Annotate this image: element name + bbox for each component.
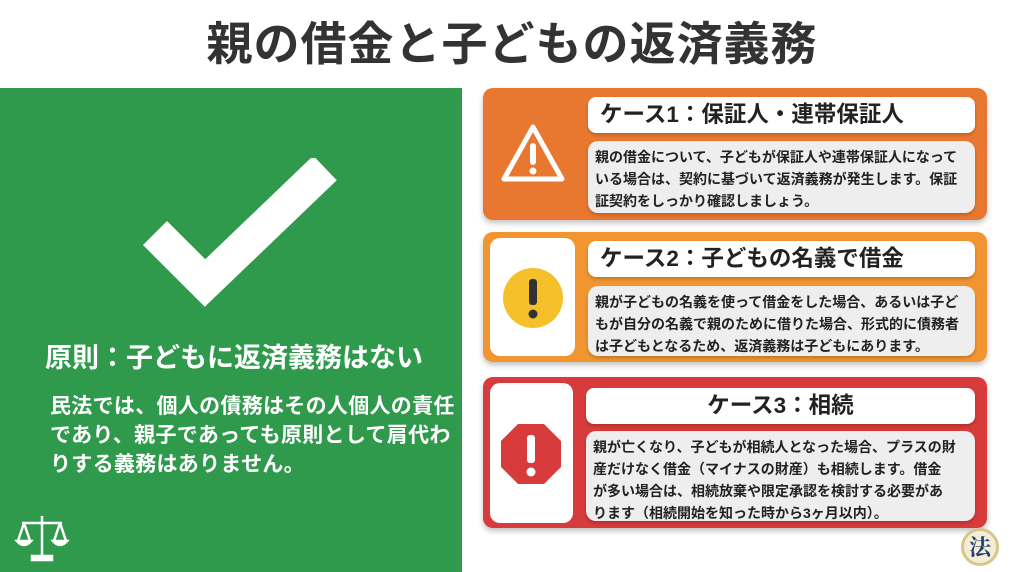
- text: case 1 body: 証契約をしっかり確認しましょう。: [595, 193, 818, 209]
- icon: yellow exclamation: [490, 238, 575, 356]
- heading: case 1: [588, 97, 975, 133]
- text: case 1 body: [588, 141, 975, 213]
- text: case 3 body: 親が亡くなり、子どもが相続人となった場合、プラスの財: [593, 439, 956, 455]
- icon: law badge: 法: [969, 531, 991, 562]
- heading: principle: 原則：子どもに返済義務はない: [45, 343, 423, 373]
- text: case 2 body: もが自分の名義で親のために借りた場合、形式的に債務者: [595, 316, 959, 332]
- heading: case 1: ケース1：保証人・連帯保証人: [600, 102, 904, 127]
- title: 親の借金と子どもの返済義務: [206, 18, 818, 70]
- icon: scales: [14, 516, 70, 562]
- text: case 2 body: 親が子どもの名義を使って借金をした場合、あるいは子ど: [595, 294, 958, 310]
- text: case 1 body: 親の借金について、子どもが保証人や連帯保証人になって: [595, 149, 957, 165]
- text: case 2 body: は子どもとなるため、返済義務は子どもにあります。: [595, 338, 929, 354]
- heading: case 3: ケース3：相続: [707, 393, 854, 418]
- text: case 3 body: 産だけなく借金（マイナスの財産）も相続します。借金: [593, 461, 941, 477]
- heading: case 2: [588, 241, 975, 277]
- icon: stop sign: [490, 383, 573, 523]
- panel: case 2: [483, 232, 987, 362]
- text: case 3 body: ります（相続開始を知った時から3ヶ月以内）。: [593, 505, 888, 521]
- icon: law badge: [961, 528, 999, 566]
- text: case 3 body: [586, 431, 975, 521]
- text: case 3 body: が多い場合は、相続放棄や限定承認を検討する必要があ: [593, 483, 943, 499]
- panel: case 1: [483, 88, 987, 220]
- text: principle body: 民法では、個人の債務はその人個人の責任であり、親子であっても原則として肩代わりする義務はありません。: [50, 395, 455, 476]
- panel: case 3: [483, 377, 987, 528]
- icon: checkmark: [143, 158, 337, 307]
- text: case 1 body: いる場合は、契約に基づいて返済義務が発生します。保証: [595, 171, 957, 187]
- panel: principle: [0, 88, 462, 572]
- icon: warning triangle: [502, 124, 564, 182]
- text: case 2 body: [588, 286, 975, 356]
- heading: case 3: [586, 388, 975, 424]
- heading: case 2: ケース2：子どもの名義で借金: [600, 246, 904, 271]
